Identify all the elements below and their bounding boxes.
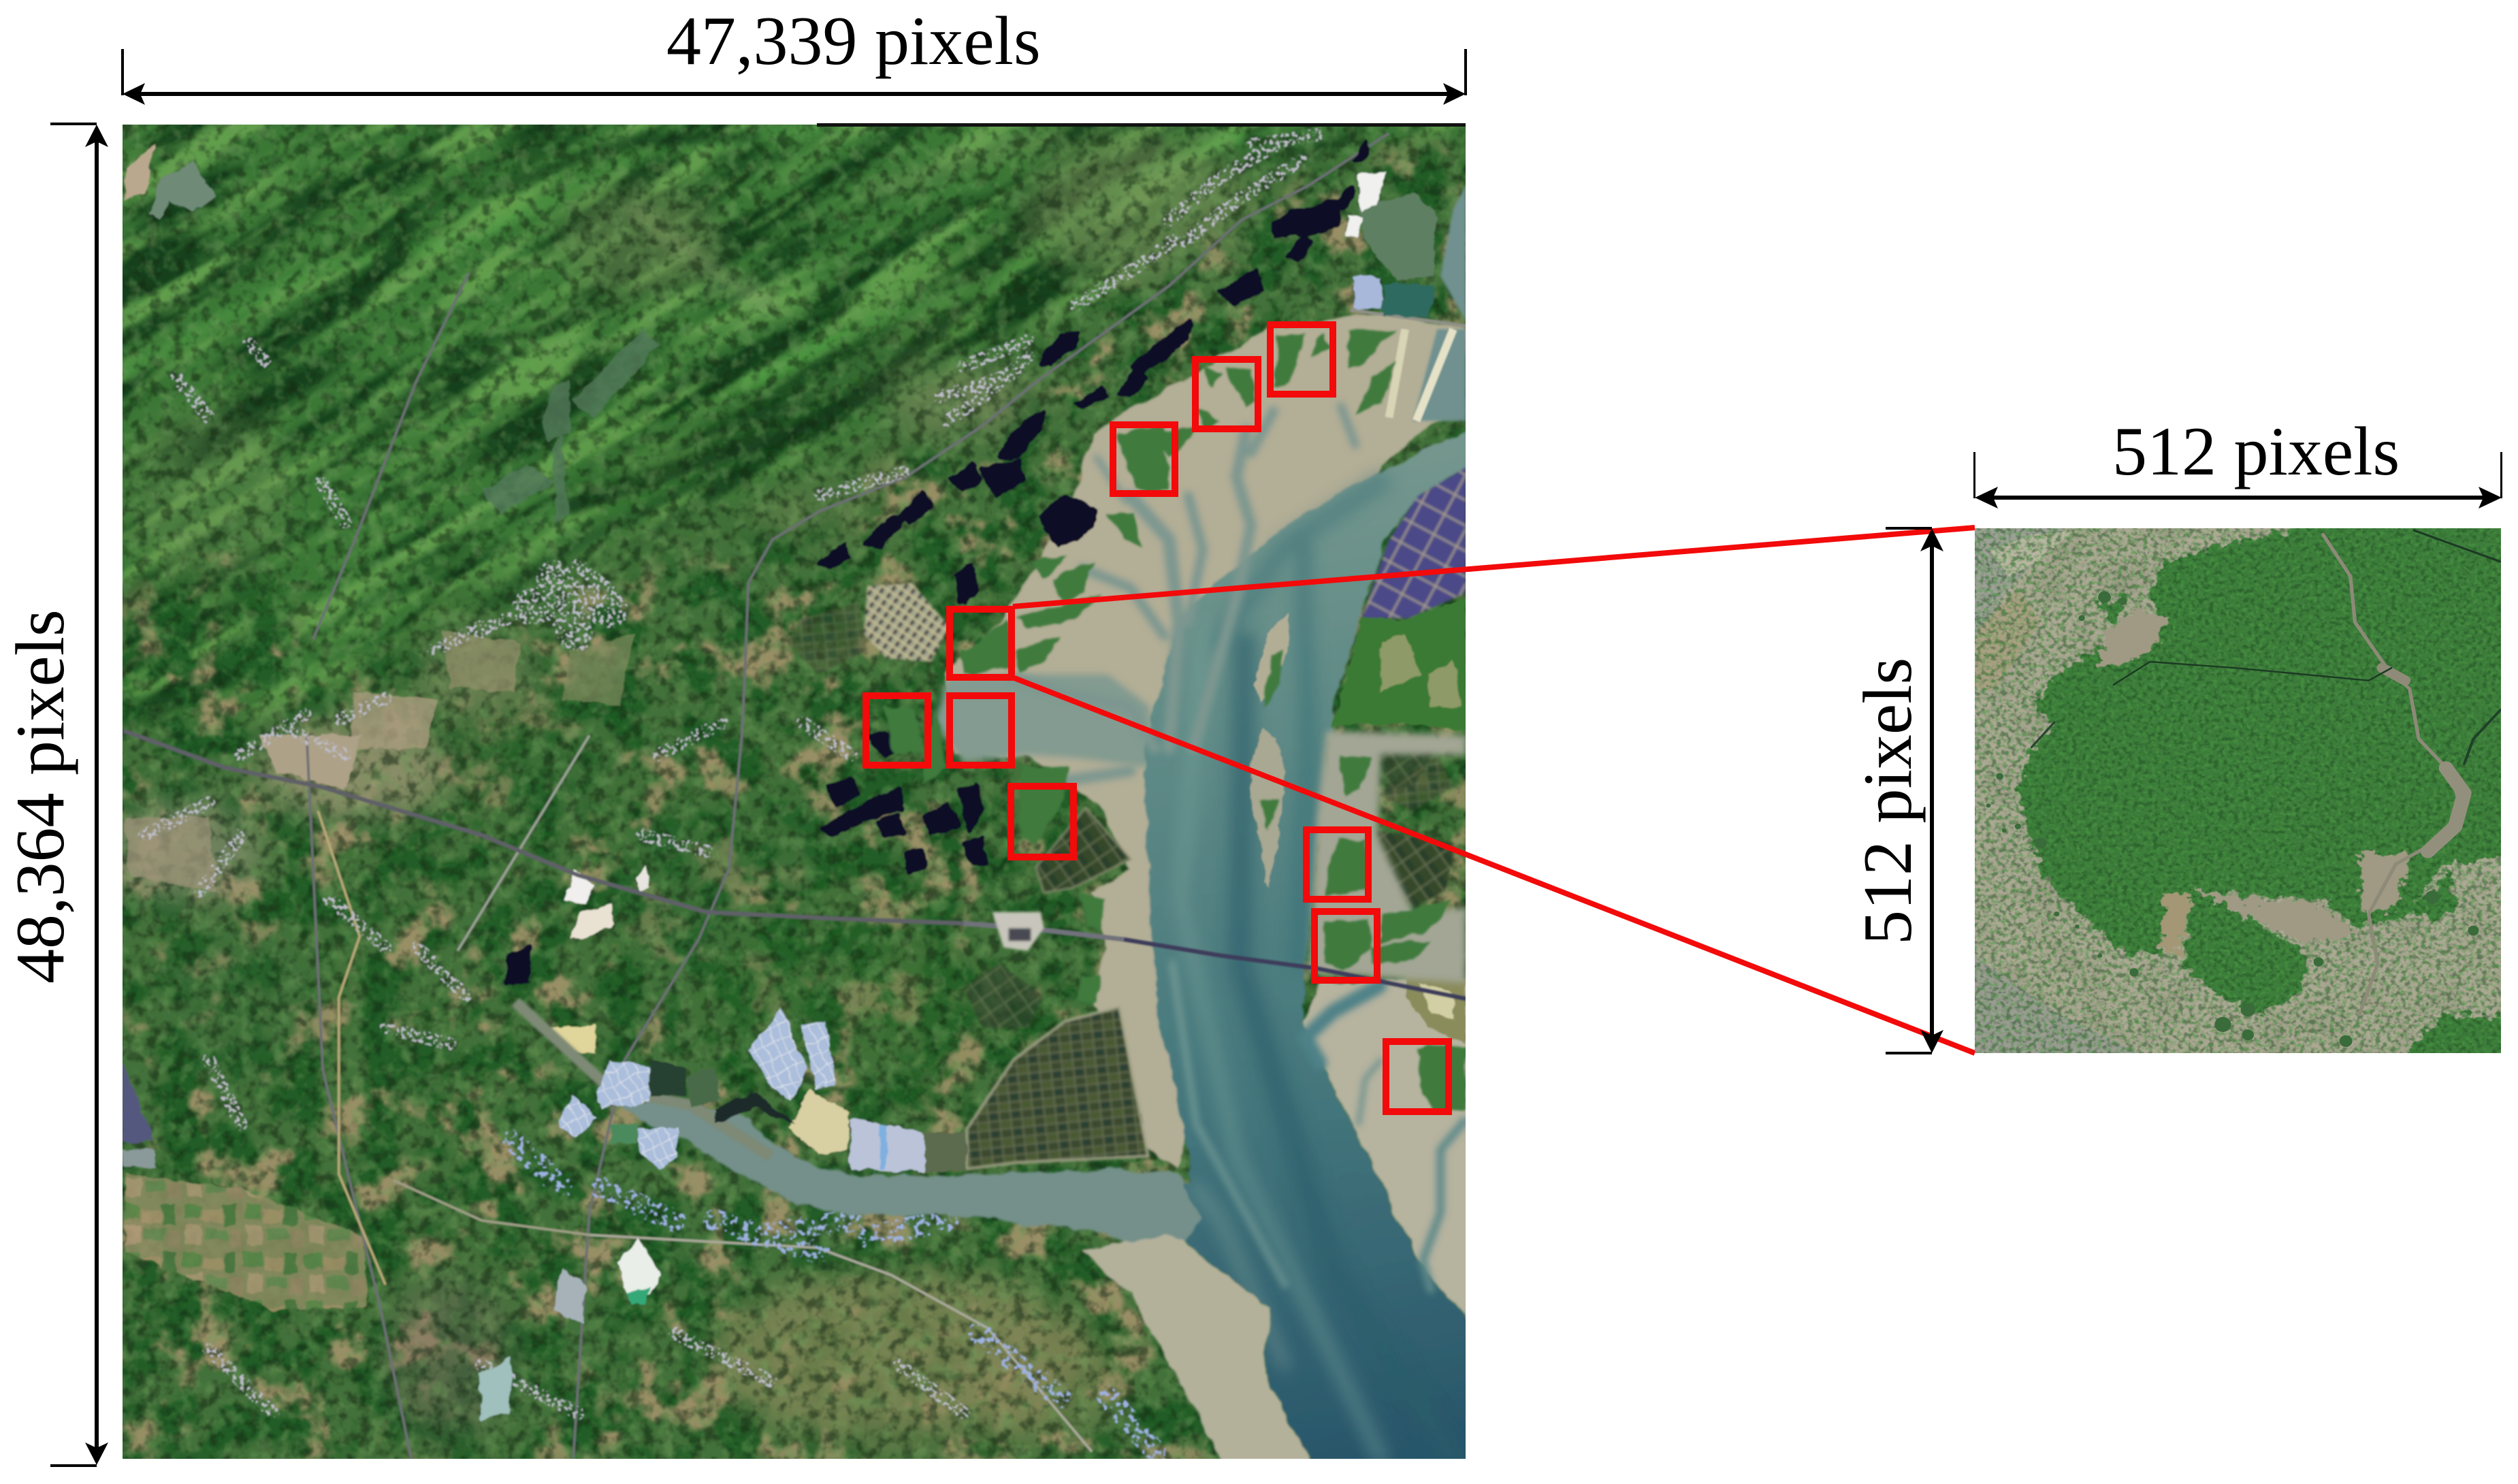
coastal mudflats north and east bbox=[948, 313, 1466, 1169]
land base colour bbox=[112, 112, 1477, 1477]
inset grey water bands bbox=[1975, 528, 2141, 1054]
mountain region bbox=[123, 125, 1458, 730]
main estuary water bbox=[1124, 421, 1485, 1469]
pond grids bbox=[787, 583, 1455, 1169]
left height label: 48,364 pixels bbox=[2, 609, 79, 984]
coastal fish ponds at top right bbox=[1346, 172, 1437, 318]
bridge toll plaza bbox=[992, 912, 1044, 951]
inset image of mangrove patch bbox=[1973, 522, 2515, 1060]
inset mangrove canopy bbox=[2018, 522, 2515, 1060]
lowland tan and forest blotches bbox=[112, 112, 1477, 1477]
inset mud ground bbox=[1973, 526, 2505, 1056]
roads bbox=[307, 133, 1389, 1458]
grey tidal delta bbox=[935, 675, 1150, 768]
south-west sand bank bbox=[1082, 1231, 1312, 1469]
dark aquaculture ponds bbox=[507, 142, 1367, 983]
seawalls and piers bbox=[1351, 310, 1466, 421]
low-frequency land tones bbox=[108, 137, 1253, 1445]
inset height arrow bbox=[1886, 527, 1943, 1054]
tidal channels bbox=[1012, 406, 1464, 1289]
top-right tidal strip bbox=[1413, 184, 1466, 421]
sand bars in channel bbox=[1249, 612, 1289, 888]
satellite top edge line bbox=[817, 123, 1466, 127]
purple ponds on east bank bbox=[1361, 467, 1466, 618]
patchwork farmland bbox=[125, 1174, 366, 1309]
top width label: 47,339 pixels bbox=[666, 3, 1041, 80]
villages bbox=[144, 135, 1317, 1413]
left height dimension arrow bbox=[50, 123, 108, 1467]
fine land texture bbox=[112, 112, 1477, 1477]
east mudflat bbox=[1309, 730, 1466, 983]
mountain ridges bbox=[125, 129, 1236, 610]
blue-roofed settlements bbox=[514, 1140, 1156, 1453]
inset top width label: 512 pixels bbox=[2112, 413, 2400, 490]
inset bare mud patches bbox=[2100, 610, 2410, 960]
southern inlet channel bbox=[610, 1100, 1201, 1269]
greenhouses and salt pans bbox=[560, 1007, 967, 1172]
inset top width arrow bbox=[1973, 452, 2502, 509]
expressway and bridge bbox=[124, 730, 1466, 999]
inset scattered shrubs bbox=[1986, 592, 2479, 1047]
inset canopy texture bbox=[2059, 564, 2469, 856]
water current streaks bbox=[1172, 482, 1453, 1458]
red zoom connector lines bbox=[1013, 528, 1975, 1053]
red sample boxes bbox=[866, 325, 1449, 1112]
reservoirs and bare land bbox=[125, 144, 658, 893]
western ponds bbox=[122, 1060, 156, 1167]
inset height label: 512 pixels bbox=[1850, 658, 1926, 945]
inset tidal creeks bbox=[2031, 530, 2501, 1014]
mangrove patches on mudflats bbox=[883, 329, 1464, 1111]
bright quarries and salt fields bbox=[479, 866, 662, 1421]
panel: full satellite image of estuary bbox=[123, 125, 1466, 1459]
east bank vegetation and villages bbox=[1333, 598, 1466, 1044]
south-east sand bank bbox=[1302, 980, 1485, 1342]
top width dimension arrow bbox=[121, 49, 1467, 105]
